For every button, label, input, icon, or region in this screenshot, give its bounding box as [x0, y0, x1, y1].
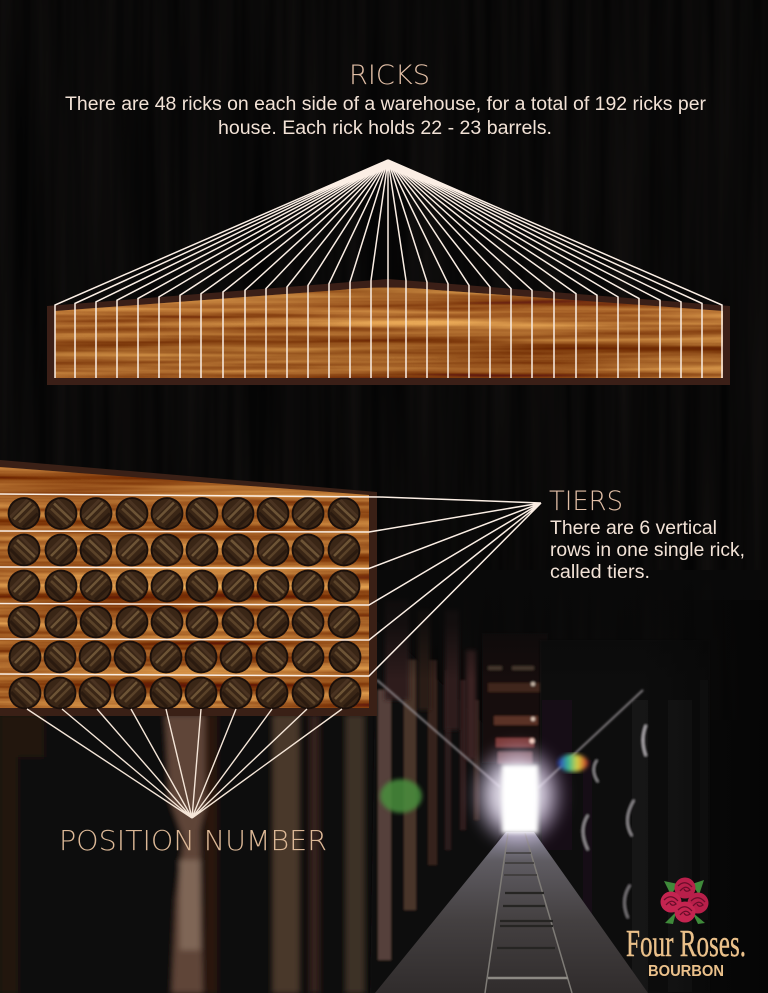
rick wood grain	[56, 288, 723, 378]
photo beams	[377, 680, 643, 788]
rick frame	[47, 279, 730, 385]
heading: tiers: TIERS	[549, 486, 623, 517]
heading: ricks: RICKS	[349, 60, 430, 91]
text: ricks description	[65, 94, 707, 139]
photo fade overlays	[370, 570, 768, 680]
photo floor	[375, 832, 648, 993]
lens flare: green	[380, 779, 422, 813]
photo left wall	[0, 700, 385, 993]
icon: roses	[660, 878, 708, 924]
rick fan lines	[55, 160, 722, 378]
position number lines	[27, 709, 342, 818]
photo ladder	[485, 833, 572, 993]
barrels	[8, 497, 361, 709]
text: ricks description: There are 48 ricks on each side of a warehouse, for a total of 192 ricks per	[65, 94, 707, 115]
photo light glow	[468, 739, 568, 851]
lens flare: rainbow	[558, 754, 588, 772]
tier wood block	[0, 460, 377, 716]
text: tiers description: There are 6 vertical	[550, 518, 717, 539]
photo ceiling	[482, 633, 548, 764]
background photo: warehouse corridor	[0, 570, 768, 993]
text: tiers description: rows in one single rick,	[550, 540, 745, 561]
photo upper wall columns	[385, 600, 476, 760]
text: tiers description	[550, 518, 745, 583]
text: tiers description: called tiers.	[550, 562, 650, 583]
heading: position number: POSITION NUMBER	[59, 824, 327, 857]
logo subline: BOURBON	[648, 963, 724, 980]
photo corridor left slats	[370, 620, 500, 993]
text: ricks description: house. Each rick holds 22 - 23 barrels.	[218, 118, 552, 139]
tier lines	[0, 494, 541, 676]
logo: Four Roses Bourbon	[626, 878, 746, 980]
tier frame	[0, 460, 377, 716]
tier wood grain	[0, 460, 372, 710]
rick wood block	[47, 279, 730, 385]
photo right wall	[540, 640, 710, 993]
